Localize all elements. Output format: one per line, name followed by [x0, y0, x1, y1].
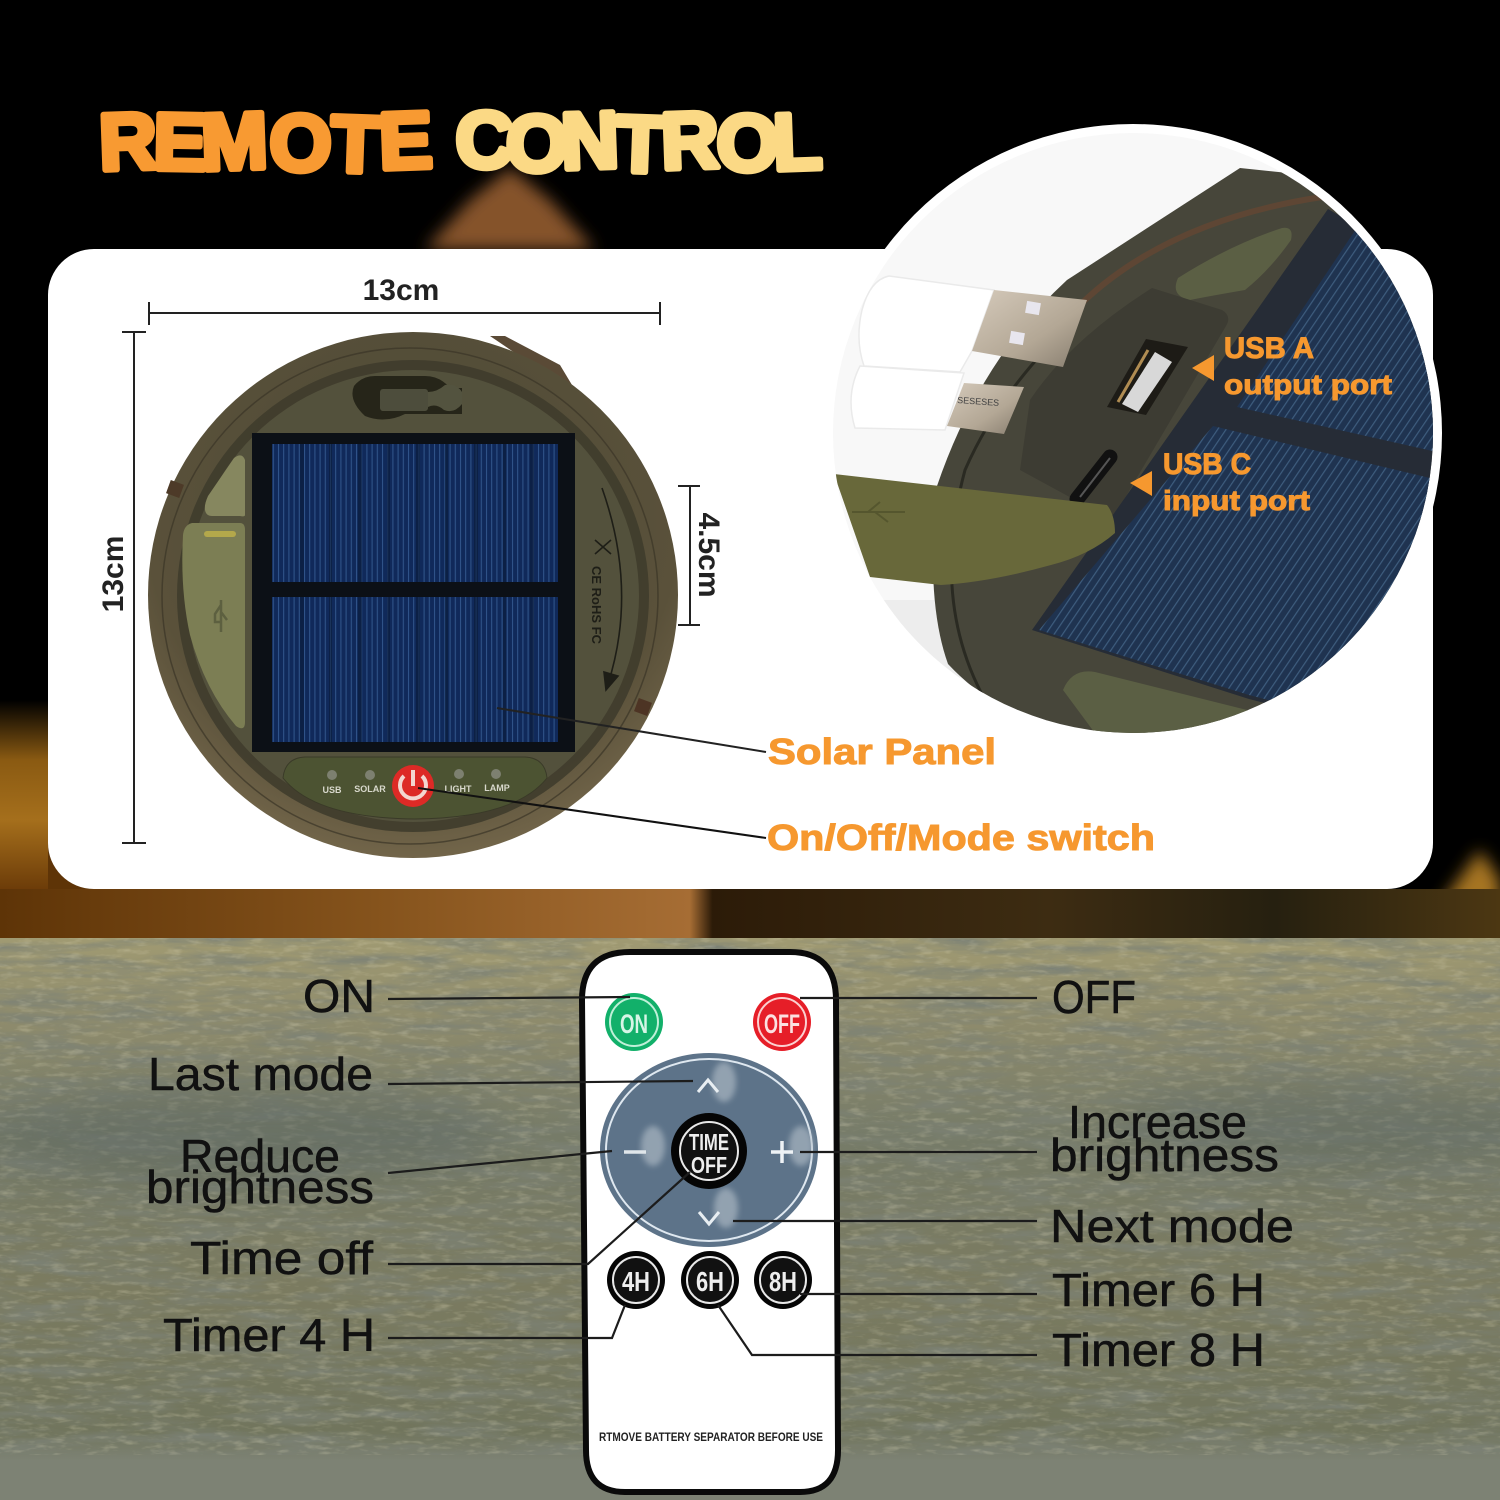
recess with ports [1020, 288, 1228, 520]
button: 6H: 6H [696, 1266, 724, 1297]
button: 8H: 8H [769, 1266, 797, 1297]
dimension: height 13cm [97, 332, 146, 843]
callout: USB A: output port [1224, 369, 1392, 400]
callout: USB A [1192, 332, 1392, 400]
button: OFF: OFF [764, 1009, 800, 1039]
cables and plugs: SESESES [957, 395, 999, 408]
leader lines: remote functions [388, 997, 1037, 1355]
labels: remote functions, left: Reduce [180, 1130, 340, 1182]
background: grass field [0, 938, 1500, 1500]
labels: remote functions, right: Increase [1068, 1096, 1247, 1148]
device body [933, 168, 1450, 750]
label: Solar Panel: Solar Panel [768, 731, 996, 772]
inset: USB ports close-up [824, 124, 1450, 750]
labels: remote functions, right: Timer 6 H [1052, 1264, 1265, 1316]
panel: white product card [48, 249, 1433, 889]
leader: mode switch [418, 788, 766, 838]
dimension: depth 4.5cm [678, 486, 725, 625]
dimension: depth 4.5cm: 4.5cm [692, 512, 725, 598]
lantern shell [148, 332, 678, 858]
solar panel angled [1032, 209, 1433, 703]
button: TIME OFF [671, 1113, 747, 1189]
dimension: height 13cm: 13cm [97, 536, 130, 612]
power button [392, 765, 434, 807]
indicator labels: USB [322, 785, 342, 795]
cables and plugs [851, 276, 1087, 434]
certification marks and rotation arrow [589, 488, 622, 690]
dimension: width 13cm [149, 274, 660, 325]
labels: remote functions, right: Next mode [1050, 1200, 1294, 1252]
callout: USB A: USB A [1224, 332, 1314, 365]
labels: remote functions, left: brightness [146, 1161, 374, 1213]
olive button: USB cover [182, 523, 245, 728]
olive button: upper [205, 455, 245, 516]
button: ON [605, 993, 663, 1051]
labels: remote functions, left: Last mode [148, 1048, 373, 1100]
button: 6H [681, 1251, 739, 1309]
battery note: RTMOVE BATTERY SEPARATOR BEFORE USE [599, 1430, 823, 1444]
button: OFF [753, 993, 811, 1051]
leader: solar panel [497, 708, 766, 752]
lantern: top view [148, 332, 678, 858]
button: TIME OFF: TIME [689, 1129, 729, 1155]
indicator labels [322, 769, 510, 795]
title word: REMOTE: REMOTE [97, 95, 434, 190]
USB A port [1107, 339, 1188, 415]
button: TIME OFF: OFF [691, 1152, 727, 1178]
remote body [582, 952, 838, 1492]
title word: CONTROL: CONTROL [455, 95, 823, 190]
olive panel: lower [1063, 672, 1248, 733]
rubber USB cover tab [834, 474, 1115, 585]
button: 4H [607, 1251, 665, 1309]
control strip [283, 757, 547, 819]
labels: remote functions, right: OFF [1052, 971, 1136, 1023]
labels: remote functions, left [146, 970, 375, 1361]
background: night scene [0, 0, 1500, 940]
arrow down [699, 1212, 719, 1224]
labels: remote functions, left: Timer 4 H [163, 1309, 375, 1361]
solar panel [252, 433, 575, 752]
plus [771, 1141, 793, 1163]
minus [624, 1150, 646, 1154]
remote control [582, 952, 838, 1492]
labels: remote functions, right [1050, 971, 1294, 1376]
labels: remote functions, left: ON [303, 970, 375, 1022]
d-pad [600, 1053, 818, 1247]
label: On/Off/Mode switch: On/Off/Mode switch [767, 817, 1155, 858]
indicator labels: SOLAR [354, 784, 386, 794]
labels: remote functions, left: Time off [190, 1232, 373, 1284]
title [97, 95, 823, 190]
arrow up [698, 1080, 718, 1092]
labels: remote functions, right: brightness [1050, 1129, 1279, 1181]
dimension: width 13cm: 13cm [363, 274, 439, 307]
certification marks and rotation arrow: CE RoHS FC [589, 566, 604, 645]
callout: USB C [1130, 448, 1310, 516]
callout: USB C: input port [1163, 485, 1310, 516]
olive panel: upper [1176, 228, 1292, 300]
button: 8H [754, 1251, 812, 1309]
indicator labels: LIGHT [444, 784, 472, 794]
hanging hook slot [352, 376, 462, 420]
labels: remote functions, right: Timer 8 H [1052, 1324, 1265, 1376]
callout: USB C: USB C [1163, 448, 1251, 481]
indicator labels: LAMP [484, 783, 510, 793]
button: 4H: 4H [622, 1266, 650, 1297]
button: ON: ON [620, 1009, 648, 1039]
USB C port [1077, 457, 1110, 499]
